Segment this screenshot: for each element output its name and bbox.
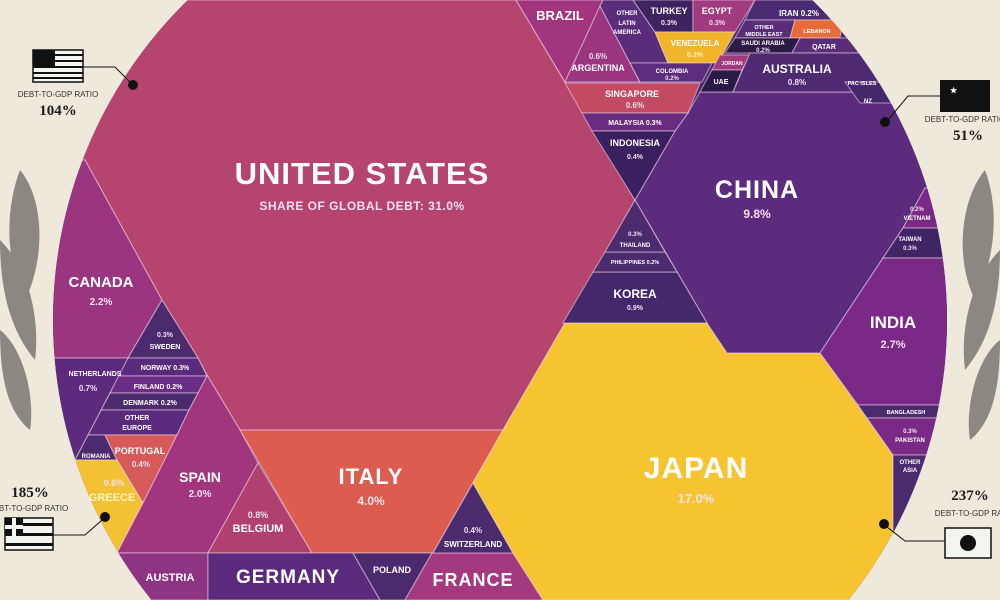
labels: FINLAND 0.2% xyxy=(134,384,183,391)
labels: 0.2% xyxy=(756,48,770,54)
labels: 0.2% xyxy=(910,207,924,213)
labels: EUROPE xyxy=(122,425,152,432)
callout: usa xyxy=(18,50,138,119)
region: jordan xyxy=(712,55,750,70)
region: austria xyxy=(118,552,208,600)
labels: 0.3% xyxy=(661,20,678,27)
region: other middle east xyxy=(735,20,795,38)
labels: QATAR xyxy=(812,44,836,51)
region: china xyxy=(636,92,927,354)
labels: 2.7% xyxy=(880,339,906,351)
labels: COLOMBIA xyxy=(656,69,689,75)
labels: 0.8% xyxy=(248,510,268,520)
region: switzerland xyxy=(433,483,513,553)
labels: POLAND xyxy=(373,565,412,575)
labels: CANADA xyxy=(68,274,134,291)
labels: 4.0% xyxy=(357,494,385,508)
labels: 0.8% xyxy=(788,78,806,87)
region: argentina xyxy=(565,6,640,82)
callout: china: ★ xyxy=(950,86,958,95)
region: venezuela xyxy=(655,32,735,63)
labels: 0.3% xyxy=(157,332,174,339)
labels: NORWAY 0.3% xyxy=(141,365,190,372)
region: pac isles / nz xyxy=(845,82,1000,103)
region: italy xyxy=(240,430,503,553)
callout: usa: 104% xyxy=(39,103,77,119)
labels: OTHER xyxy=(616,11,638,17)
region: france xyxy=(405,553,543,600)
labels: ASIA xyxy=(903,468,918,474)
region: other asia xyxy=(892,454,926,534)
labels: VIETNAM xyxy=(904,216,931,222)
region: portugal xyxy=(105,435,177,503)
labels: IRAN 0.2% xyxy=(779,9,819,18)
labels: 0.3% xyxy=(687,52,704,59)
labels: TAIWAN xyxy=(898,237,922,243)
labels: UAE xyxy=(714,79,729,86)
region: iran xyxy=(745,0,1000,20)
labels: 0.3% xyxy=(903,246,917,252)
region: denmark xyxy=(101,393,198,410)
region: poland xyxy=(353,553,432,600)
labels: PAC ISLES xyxy=(848,81,877,87)
labels: LEBANON xyxy=(803,29,831,35)
region: turkey xyxy=(633,0,693,32)
callout: usa: DEBT-TO-GDP RATIO xyxy=(18,90,98,99)
labels: 0.2% xyxy=(665,76,679,82)
labels: 0.4% xyxy=(132,460,150,469)
labels: SPAIN xyxy=(179,469,221,485)
region: japan xyxy=(473,323,893,600)
labels: 0.6% xyxy=(104,478,124,488)
labels: 9.8% xyxy=(743,207,771,221)
region: qatar xyxy=(792,38,1000,53)
labels: FRANCE xyxy=(432,570,514,590)
labels: TURKEY xyxy=(650,6,688,16)
region: spain xyxy=(117,375,258,553)
region: romania xyxy=(75,435,117,460)
labels: AUSTRALIA xyxy=(762,62,832,76)
labels: BRAZIL xyxy=(536,8,584,23)
labels: SHARE OF GLOBAL DEBT: 31.0% xyxy=(259,199,465,213)
decorative leaves left xyxy=(0,170,39,430)
labels: 0.9% xyxy=(627,305,644,312)
labels: 0.7% xyxy=(79,384,97,393)
labels: 0.3% xyxy=(709,20,726,27)
labels: 17.0% xyxy=(678,491,715,506)
region: germany xyxy=(208,553,380,600)
labels: AMERICA xyxy=(613,30,642,36)
labels: 2.2% xyxy=(90,297,113,308)
callout: greece xyxy=(0,485,110,550)
labels: KOREA xyxy=(613,287,657,301)
region: other europe xyxy=(88,410,189,435)
labels: NZ xyxy=(864,99,872,105)
labels: LATIN xyxy=(618,21,636,27)
labels: SAUDI ARABIA xyxy=(741,41,785,47)
region: finland xyxy=(110,376,207,393)
region: taiwan xyxy=(882,228,943,258)
region: sweden xyxy=(128,300,198,358)
region: norway xyxy=(118,358,207,376)
region: korea xyxy=(563,272,707,323)
region: singapore xyxy=(565,83,700,113)
labels: MIDDLE EAST xyxy=(745,32,783,38)
labels: DENMARK 0.2% xyxy=(123,400,178,407)
callout: japan: 237% xyxy=(951,488,989,504)
region: philippines xyxy=(593,252,677,272)
region: brazil xyxy=(516,0,603,82)
labels: JAPAN xyxy=(644,452,748,485)
labels: SWEDEN xyxy=(150,344,180,351)
labels: ROMANIA xyxy=(82,454,111,460)
region: united states xyxy=(82,0,635,430)
labels: INDONESIA xyxy=(610,138,660,148)
region: saudi arabia xyxy=(725,38,800,53)
labels: SINGAPORE xyxy=(605,89,659,99)
region: canada xyxy=(53,160,162,358)
region: indonesia xyxy=(592,131,675,200)
region: netherlands xyxy=(54,358,128,459)
labels: JORDAN xyxy=(721,61,743,67)
region: uae xyxy=(700,70,742,92)
region: lebanon xyxy=(790,20,843,38)
callout: greece: 185% xyxy=(11,485,49,501)
labels: THAILAND xyxy=(620,243,651,249)
labels: BANGLADESH xyxy=(887,410,925,416)
labels: BELGIUM xyxy=(233,523,283,535)
region: colombia xyxy=(630,63,712,82)
labels: PHILIPPINES 0.2% xyxy=(611,260,659,266)
labels: INDIA xyxy=(870,313,916,332)
region: egypt xyxy=(693,0,755,32)
labels: UNITED STATES xyxy=(235,156,489,191)
labels: PAKISTAN xyxy=(895,438,925,444)
region: greece xyxy=(76,460,143,552)
labels: VENEZUELA xyxy=(671,39,719,48)
labels: OTHER xyxy=(754,25,774,31)
region: pakistan xyxy=(866,418,936,456)
labels: 0.3% xyxy=(903,429,917,435)
labels: ARGENTINA xyxy=(571,63,625,73)
callout: china xyxy=(880,80,1000,144)
labels: CHINA xyxy=(715,176,799,204)
region: australia xyxy=(733,53,1000,92)
region: vietnam xyxy=(902,188,938,228)
labels: GERMANY xyxy=(236,567,340,588)
labels: OTHER xyxy=(125,415,149,422)
labels: AUSTRIA xyxy=(146,572,194,584)
labels: 0.6% xyxy=(626,101,644,110)
labels: NETHERLANDS xyxy=(69,371,122,378)
callout: china: 51% xyxy=(953,128,983,144)
region: belgium xyxy=(208,463,312,553)
region: thailand xyxy=(605,200,665,252)
labels: GREECE xyxy=(89,492,135,504)
labels: 0.3% xyxy=(628,232,642,238)
region: malaysia xyxy=(582,113,688,131)
decorative leaves right xyxy=(963,170,1000,440)
labels: ITALY xyxy=(339,464,403,489)
labels: 0.4% xyxy=(627,154,644,161)
labels: 0.6% xyxy=(589,52,607,61)
labels: SWITZERLAND xyxy=(444,540,502,549)
callout: japan xyxy=(879,488,1000,558)
labels: 2.0% xyxy=(189,489,212,500)
region: other latin america xyxy=(600,0,668,82)
region: bangladesh xyxy=(857,404,939,418)
labels: OTHER xyxy=(900,460,921,466)
labels: PORTUGAL xyxy=(115,446,166,456)
labels: EGYPT xyxy=(702,6,733,16)
labels: MALAYSIA 0.3% xyxy=(608,120,663,127)
labels: 0.4% xyxy=(464,526,482,535)
region: india xyxy=(820,258,947,406)
